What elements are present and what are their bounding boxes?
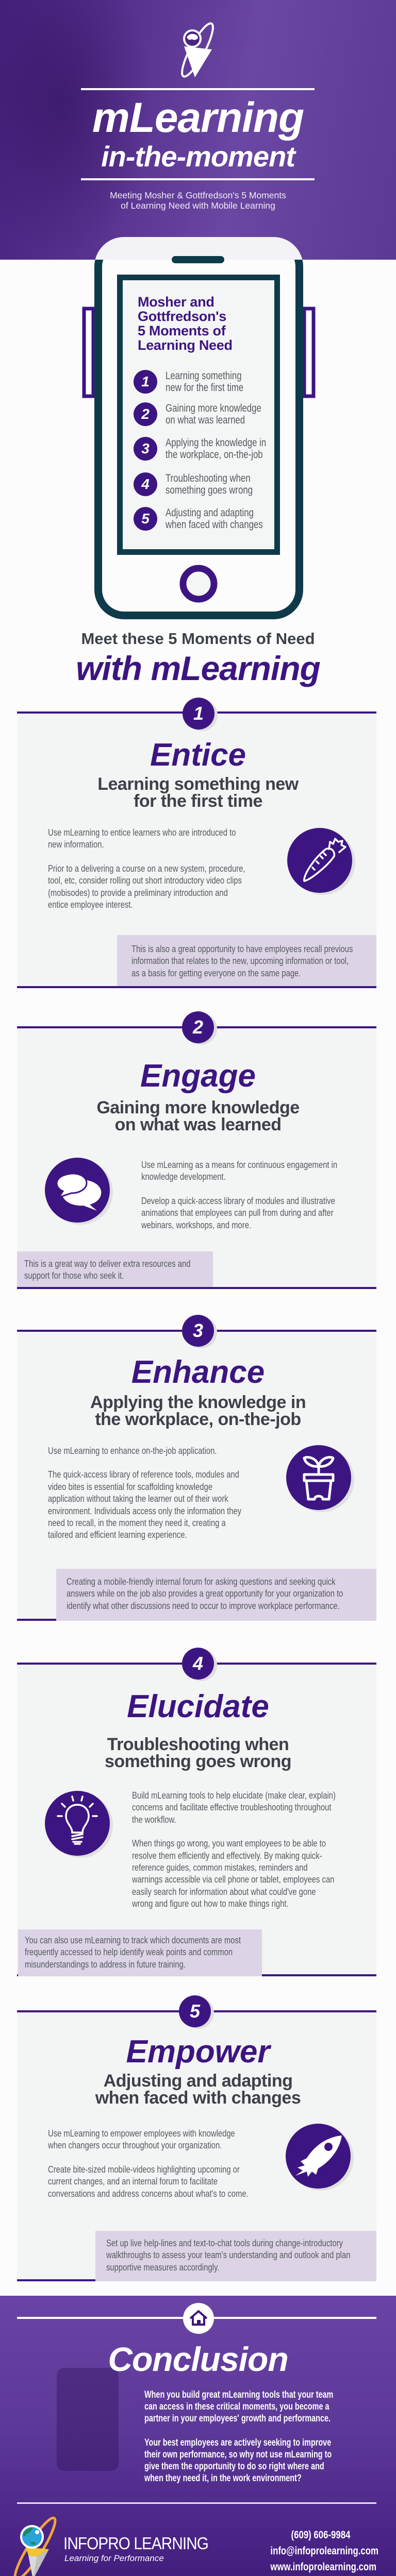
engage text: knowledge development. [141, 1171, 226, 1182]
list: 5 moments: 2 [141, 406, 150, 422]
enhance subtitle: the workplace, on-the-job [95, 1410, 301, 1429]
header background [0, 0, 396, 260]
panel: conclusion [0, 2296, 396, 2576]
elucidate callout text [25, 1935, 241, 1970]
elucidate subtitle [105, 1735, 291, 1771]
list: 5 moments: 3 [141, 440, 150, 456]
number 2: 2 [193, 1016, 203, 1038]
title [81, 88, 315, 180]
list: 5 moments: the workplace, on-the-job [166, 449, 263, 461]
footer brand [63, 2534, 208, 2563]
list: 5 moments: Troubleshooting when [166, 472, 251, 484]
conclusion text: give them the opportunity to do so right where and [144, 2461, 324, 2472]
elucidate title: Elucidate [127, 1689, 269, 1724]
entice subtitle: Learning something new [97, 774, 299, 794]
callout [18, 1929, 262, 1976]
number 3: 3 [193, 1320, 203, 1341]
elucidate text: easily search for information about what could've gone [132, 1886, 316, 1897]
screen title: 5 Moments of [138, 323, 225, 338]
elucidate text: When things go wrong, you want employees to be able to [132, 1838, 326, 1849]
entice text: Prior to a delivering a course on a new system, procedure, [48, 863, 245, 874]
conclusion text: When you build great mLearning tools that your team [144, 2389, 333, 2400]
engage text: Develop a quick-access library of modules and illustrative [141, 1195, 335, 1206]
empower text: conversations and address concerns about what's to come. [48, 2188, 249, 2199]
phone [82, 237, 316, 619]
screen title: Learning Need [138, 337, 233, 353]
footer contact [270, 2529, 378, 2573]
title: mLearning [92, 94, 304, 141]
number 3 [182, 1315, 214, 1347]
elucidate callout text: You can also use mLearning to track which documents are most [25, 1935, 241, 1945]
enhance callout text: Creating a mobile-friendly internal forum for asking questions and seeking quick [67, 1576, 336, 1587]
empower text: Create bite-sized mobile-videos highlighting upcoming or [48, 2164, 240, 2175]
number 4 [182, 1648, 214, 1680]
enhance text: video bites is essential for scaffolding knowledge [48, 1481, 212, 1492]
number 1 [183, 698, 214, 730]
heading: with mLearning: with mLearning [76, 649, 320, 687]
engage text: webinars, workshops, and more. [141, 1219, 251, 1230]
empower text: when changers occur throughout your organization. [48, 2140, 222, 2150]
subtitle [110, 190, 286, 211]
enhance text: application without taking the learner out of their work [48, 1493, 228, 1504]
list: 5 moments: Gaining more knowledge [166, 402, 261, 414]
entice text: entice employee interest. [48, 899, 133, 910]
icon: chat bubbles [45, 1158, 113, 1225]
elucidate text: Build mLearning tools to help elucidate (make clear, explain) [132, 1790, 336, 1801]
enhance text [48, 1445, 241, 1540]
empower subtitle: when faced with changes [95, 2088, 301, 2108]
footer brand: INFOPRO LEARNING [63, 2534, 208, 2553]
subtitle: Meeting Mosher & Gottfredson's 5 Moments [110, 190, 286, 200]
empower callout text [106, 2238, 350, 2273]
icon: lightbulb [45, 1791, 113, 1858]
conclusion text [144, 2389, 333, 2484]
heading: meet these 5 moments: Meet these 5 Moments of Need [81, 630, 315, 648]
enhance text: Use mLearning to enhance on-the-job application. [48, 1445, 217, 1456]
callout [95, 2231, 376, 2281]
subtitle: of Learning Need with Mobile Learning [121, 200, 275, 211]
enhance text: need to recall, in the moment they need it, creating a [48, 1517, 226, 1528]
screen title: Gottfredson's [138, 309, 226, 324]
enhance text: The quick-access library of reference tools, modules and [48, 1469, 239, 1480]
list: 5 moments: something goes wrong [166, 484, 253, 496]
entice text [48, 827, 245, 910]
elucidate callout text: frequently accessed to help identify weak points and common [25, 1946, 233, 1957]
footer brand: Learning for Performance [64, 2553, 164, 2563]
number 2 [182, 1011, 214, 1043]
list: 5 moments [134, 370, 266, 531]
number 5: 5 [190, 2001, 200, 2022]
footer contact: www.infoprolearning.com [270, 2561, 376, 2573]
title: in-the-moment [101, 140, 295, 173]
conclusion text: their own performance, so why not use mLearning to [144, 2449, 332, 2460]
icon: home [183, 2303, 214, 2334]
enhance text: tailored and efficient learning experience. [48, 1529, 187, 1540]
empower subtitle [95, 2071, 301, 2108]
panel: 3 enhance [17, 1330, 376, 1621]
empower callout text: Set up live help-lines and text-to-chat tools during change-introductory [106, 2238, 343, 2248]
entice callout text: information that relates to the new, upcoming information or tool, [131, 955, 349, 966]
elucidate subtitle: Troubleshooting when [107, 1735, 289, 1754]
engage subtitle: Gaining more knowledge [96, 1098, 300, 1117]
entice callout text: as a basis for getting everyone on the same page. [131, 968, 301, 978]
callout [56, 1569, 376, 1621]
panel: 5 empower [17, 2010, 376, 2281]
entice subtitle [97, 774, 299, 811]
list: 5 moments: on what was learned [166, 414, 245, 426]
conclusion text: can access in these critical moments, you become a [144, 2401, 329, 2412]
elucidate text: wrong and figure out how to make things right. [132, 1898, 289, 1909]
engage subtitle: on what was learned [114, 1115, 282, 1134]
engage callout text: support for those who seek it. [24, 1270, 124, 1281]
number 5 [179, 1995, 211, 2027]
engage text: animations that employees can pull from during and after [141, 1207, 334, 1218]
entice callout text [131, 943, 353, 978]
elucidate subtitle: something goes wrong [105, 1752, 291, 1771]
screen title [138, 294, 233, 353]
conclusion text: Your best employees are actively seeking to improve [144, 2437, 331, 2448]
list: 5 moments: 1 [141, 374, 150, 389]
list: 5 moments: Applying the knowledge in [166, 437, 266, 449]
icon: plant pot [286, 1445, 354, 1512]
conclusion title: Conclusion [108, 2340, 288, 2378]
empower callout text: walkthroughs to assess your team's understanding and outlook and plan [106, 2249, 350, 2260]
elucidate text: warnings accessible via cell phone or tablet, employees can [132, 1874, 334, 1885]
divider with home icon [17, 2317, 376, 2319]
callout [117, 935, 376, 986]
conclusion text: partner in your employees' growth and performance. [144, 2413, 331, 2424]
engage callout text [24, 1258, 190, 1281]
entice callout text: This is also a great opportunity to have employees recall previous [131, 943, 353, 954]
engage subtitle [96, 1098, 300, 1134]
elucidate text: reference guides, common mistakes, reminders and [132, 1862, 308, 1873]
panel: 1 entice [17, 711, 376, 988]
engage text: Use mLearning as a means for continuous engagement in [141, 1159, 337, 1170]
list: 5 moments: 4 [141, 476, 150, 492]
footer contact: (609) 606-9984 [291, 2529, 350, 2541]
elucidate text: resolve them efficiently and effectively. By making quick- [132, 1850, 322, 1861]
number 1: 1 [193, 703, 204, 724]
engage callout text: This is a great way to deliver extra resources and [24, 1258, 190, 1269]
entice title: Entice [150, 737, 246, 773]
enhance callout text: answers while on the job also provides a great opportunity for your organization to [67, 1588, 343, 1599]
footer logo [13, 2516, 57, 2576]
entice text: tool, etc, consider rolling out short introductory video clips [48, 875, 242, 886]
footer contact: info@infoprolearning.com [270, 2545, 378, 2557]
empower callout text: supportive measures accordingly. [106, 2262, 219, 2273]
panel: 4 elucidate [17, 1663, 376, 1976]
enhance subtitle: Applying the knowledge in [90, 1393, 306, 1412]
enhance subtitle [90, 1393, 306, 1429]
enhance callout text [67, 1576, 343, 1611]
entice text: Use mLearning to entice learners who are introduced to [48, 827, 236, 838]
enhance callout text: identify what other discussions need to occur to improve workplace performance. [67, 1600, 340, 1611]
list: 5 moments: when faced with changes [166, 519, 263, 531]
list: 5 moments: 5 [141, 511, 150, 527]
list: 5 moments: Adjusting and adapting [166, 507, 254, 519]
entice text: new information. [48, 839, 104, 850]
screen title: Mosher and [138, 294, 214, 310]
list: 5 moments: new for the first time [166, 382, 243, 394]
empower text: current changes, and an internal forum to facilitate [48, 2176, 218, 2187]
icon: rocket [286, 2124, 354, 2191]
icon: carrot [287, 828, 355, 895]
elucidate text [132, 1790, 336, 1909]
panel: 2 engage [17, 1026, 376, 1289]
list: 5 moments: Learning something [166, 370, 242, 382]
engage text [141, 1159, 337, 1230]
elucidate callout text: misunderstandings to address in future training. [25, 1959, 186, 1970]
enhance title: Enhance [131, 1354, 265, 1390]
elucidate text: the workflow. [132, 1814, 176, 1825]
engage title: Engage [140, 1058, 256, 1094]
empower title: Empower [126, 2034, 270, 2070]
callout [17, 1251, 213, 1287]
entice text: (mobisodes) to provide a preliminary introduction and [48, 887, 228, 898]
empower text: Use mLearning to empower employees with knowledge [48, 2128, 235, 2139]
number 4: 4 [193, 1653, 203, 1674]
empower subtitle: Adjusting and adapting [104, 2071, 292, 2091]
icon: top logo [181, 22, 214, 78]
conclusion text: when they need it, in the work environment? [144, 2472, 302, 2484]
entice subtitle: for the first time [134, 791, 262, 811]
elucidate text: concerns and facilitate effective troubleshooting throughout [132, 1802, 331, 1812]
empower text [48, 2128, 249, 2199]
enhance text: environment. Individuals access only the information they [48, 1505, 241, 1516]
